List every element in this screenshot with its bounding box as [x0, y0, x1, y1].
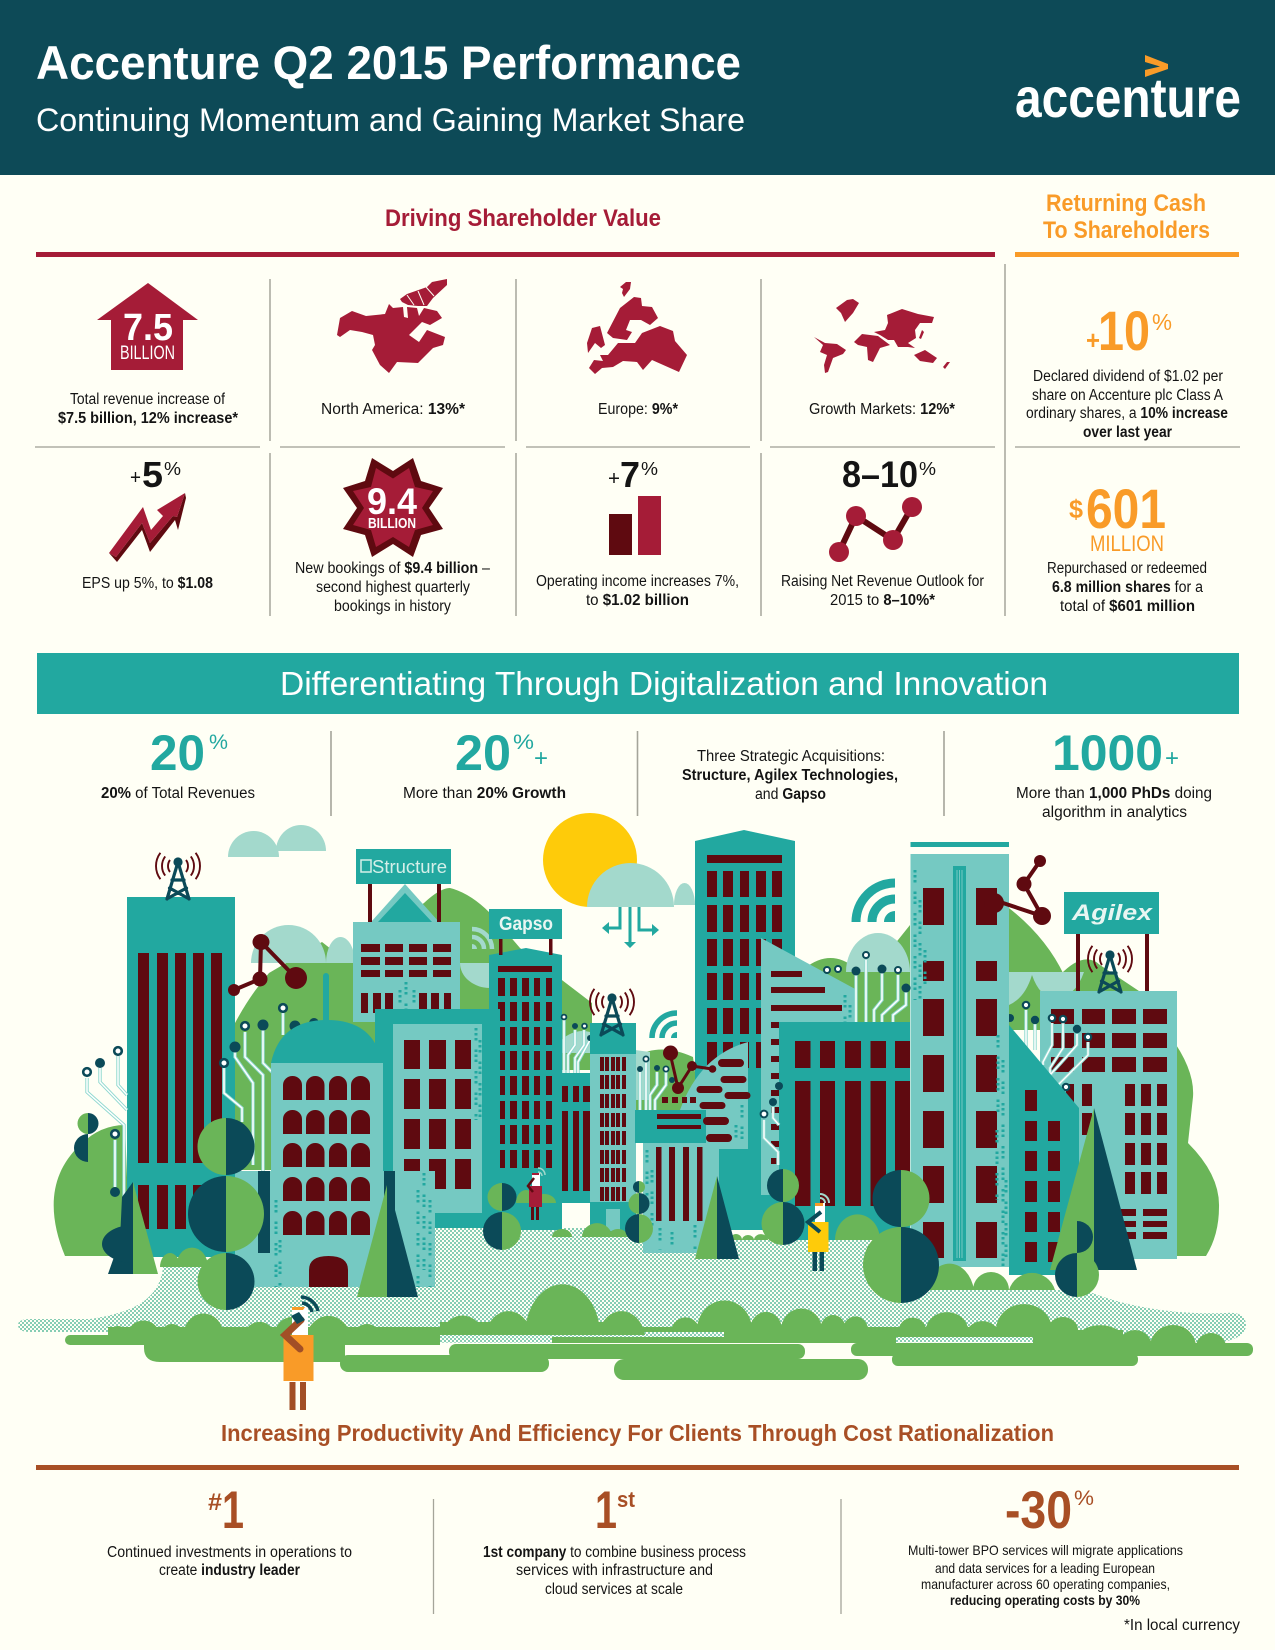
panel: outlook: 2015 to 8–10%* — [830, 592, 936, 609]
text: bookings: second highest quarterly — [316, 579, 470, 596]
panel: outlook: % — [919, 459, 936, 479]
stat: first company: 1 — [595, 1481, 617, 1540]
circuit lines: right centre — [761, 952, 910, 1165]
cloud with arrows — [587, 863, 695, 948]
icon: house arrow: 7.5 — [123, 307, 173, 349]
stat: number one: Continued investments in operations to — [107, 1544, 352, 1561]
stat: 20 percent growth: % — [513, 731, 534, 754]
heading: returning cash — [1015, 190, 1239, 257]
header banner — [0, 0, 1275, 175]
panel: north america — [321, 279, 466, 418]
panel: outlook: 8–10 — [842, 454, 918, 495]
building: gapso with sign: Gapso — [499, 914, 553, 935]
icon: north america map — [337, 279, 447, 373]
small bushes behind trees — [160, 1190, 1055, 1290]
building: tall light tower — [910, 842, 1009, 1273]
stat: number one: # — [208, 1489, 222, 1516]
panel: new bookings — [295, 458, 490, 615]
panel: outlook — [781, 454, 984, 609]
panel: buyback: 601 — [1086, 477, 1166, 540]
agilex sign posts — [1076, 934, 1149, 992]
building: striped low — [643, 1143, 719, 1253]
text: dividend: Declared dividend of $1.02 per — [1033, 368, 1223, 385]
molecule: centre — [663, 1046, 716, 1094]
stat: first company — [483, 1481, 746, 1598]
text: dividend — [1026, 368, 1228, 441]
building: dome — [235, 973, 435, 1291]
text: buyback: Repurchased or redeemed — [1047, 560, 1207, 577]
stat: 20 percent growth — [403, 725, 566, 802]
icon: house arrow — [97, 283, 198, 370]
ground — [18, 1228, 1246, 1343]
panel: dividend: 10 — [1098, 299, 1150, 362]
stat: minus 30 percent: and data services for a leading European — [935, 1560, 1155, 1576]
circuit lines: right — [1006, 1002, 1091, 1095]
icon: star badge: BILLION — [368, 516, 416, 532]
stat: 1000 PhDs: algorithm in analytics — [1042, 804, 1187, 821]
circuit lines: left — [83, 1004, 319, 1200]
building: domed light with pills — [635, 1042, 780, 1230]
triangle tree: dome right — [357, 1185, 418, 1297]
person: red — [528, 1168, 545, 1220]
text: bookings — [295, 560, 490, 615]
triangle tree: left — [102, 1182, 158, 1274]
stat: minus 30 percent: % — [1074, 1487, 1094, 1510]
panel: dividend — [1026, 299, 1228, 441]
title: Accenture Q2 2015 Performance — [36, 36, 741, 89]
panel: dividend: + — [1086, 325, 1100, 355]
tree: small left — [74, 1113, 99, 1162]
icon: rising arrow — [109, 493, 186, 562]
stat: first company: cloud services at scale — [545, 1581, 683, 1598]
person: orange — [284, 1297, 318, 1410]
text: buyback — [1047, 560, 1207, 615]
wifi icons — [472, 883, 895, 1038]
text: revenue — [58, 391, 239, 427]
stat: 20 percent growth: More than 20% Growth — [403, 785, 566, 802]
panel: buyback: MILLION — [1090, 531, 1164, 556]
text: acquisitions: and Gapso — [755, 786, 826, 803]
stat: number one — [107, 1481, 352, 1579]
building: structure with sign: Structure — [372, 857, 447, 877]
panel: growth markets — [809, 299, 956, 418]
clouds — [228, 825, 1084, 1100]
tree: centre right — [762, 1169, 804, 1245]
stat: number one: create industry leader — [159, 1562, 300, 1579]
panel: revenue — [58, 283, 239, 427]
stat: 1000 PhDs: 1000 — [1052, 725, 1163, 781]
panel: north america: North America: 13%* — [321, 401, 466, 418]
text: dividend: share on Accenture plc Class A — [1032, 387, 1224, 404]
hills — [54, 888, 1219, 1256]
panel: operating income: Operating income increases 7%, — [536, 573, 739, 590]
stat: 1000 PhDs — [1016, 725, 1212, 821]
tree: centre — [625, 1181, 653, 1243]
panel: operating income: % — [641, 459, 658, 479]
triangle tree: right — [1050, 1108, 1137, 1270]
building: teal wedge — [1009, 1025, 1079, 1275]
text: dividend: over last year — [1083, 424, 1172, 441]
panel: eps: 5 — [142, 454, 163, 495]
text: revenue: $7.5 billion, 12% increase* — [58, 410, 239, 427]
agilex sign — [1064, 892, 1159, 934]
subtitle: Continuing Momentum and Gaining Market Share — [36, 102, 745, 138]
panel: buyback: $ — [1069, 494, 1084, 524]
stat: 1000 PhDs: + — [1165, 745, 1179, 772]
heading: driving shareholder value — [36, 205, 995, 257]
stat: minus 30 percent: Multi-tower BPO services will migrate applications — [908, 1542, 1183, 1558]
banner: digitalization: Differentiating Through Digitalization and Innovation — [280, 665, 1048, 702]
panel: europe: Europe: 9%* — [598, 401, 679, 418]
tower: left — [127, 853, 235, 1257]
tree: right — [1055, 1221, 1099, 1297]
text: buyback: total of $601 million — [1060, 598, 1195, 615]
text: acquisitions — [682, 748, 898, 803]
molecule: left — [228, 934, 307, 996]
stat: first company: services with infrastructure and — [516, 1562, 713, 1579]
icon: star badge — [343, 458, 443, 557]
heading: driving shareholder value: Driving Shareholder Value — [385, 205, 661, 232]
text: acquisitions: Three Strategic Acquisitions: — [697, 748, 885, 765]
tree: dome left — [188, 1118, 264, 1310]
sun — [543, 813, 637, 907]
building: structure with sign — [353, 849, 460, 1022]
panel: eps: + — [130, 467, 141, 489]
text: buyback: 6.8 million shares for a — [1052, 579, 1203, 596]
panel: eps: EPS up 5%, to $1.08 — [82, 575, 213, 592]
stat: first company: st — [617, 1487, 636, 1512]
text: acquisitions: Structure, Agilex Technologies, — [682, 767, 898, 784]
building: teal with long windows — [779, 1022, 910, 1240]
text: bookings: bookings in history — [334, 598, 451, 615]
panel: buyback — [1047, 477, 1207, 615]
illustration: digital city — [18, 813, 1253, 1410]
icon: world map — [814, 299, 950, 373]
building: small windows — [562, 1073, 592, 1203]
icon: line chart — [829, 497, 922, 562]
stat: 20 percent revenues — [101, 725, 255, 802]
panel: operating income: + — [608, 468, 620, 490]
stat: minus 30 percent: -30 — [1005, 1481, 1072, 1540]
panel: europe — [587, 282, 687, 418]
stat: minus 30 percent: reducing operating costs by 30% — [950, 1592, 1140, 1608]
tree: big right centre — [863, 1170, 939, 1303]
heading: returning cash: To Shareholders — [1043, 217, 1210, 244]
building: thin tower — [590, 989, 636, 1237]
heading: productivity: Increasing Productivity And Efficiency For Clients Through Cost Rationalization — [221, 1420, 1054, 1446]
circuit lines: middle — [562, 1015, 675, 1110]
panel: dividend: % — [1152, 309, 1172, 335]
foreground bushes — [65, 1284, 1253, 1380]
building: gapso with sign — [489, 909, 562, 1230]
footnote: *In local currency — [1124, 1617, 1240, 1634]
building: front mid — [375, 1009, 500, 1228]
stat: 20 percent revenues: 20 — [150, 725, 205, 781]
panel: outlook: Raising Net Revenue Outlook for — [781, 573, 984, 590]
agilex sign: Agilex — [1071, 900, 1153, 925]
text: dividend: ordinary shares, a 10% increase — [1026, 405, 1228, 422]
panel: operating income: 7 — [620, 454, 640, 495]
panel: operating income: to $1.02 billion — [586, 592, 689, 609]
stat: minus 30 percent: manufacturer across 60 operating companies, — [921, 1576, 1170, 1592]
stat: 1000 PhDs: More than 1,000 PhDs doing — [1016, 785, 1212, 802]
icon: star badge: 9.4 — [367, 481, 417, 522]
building: right with agilex tower — [1040, 946, 1177, 1259]
icon: europe map — [587, 282, 687, 374]
panel: eps: % — [164, 459, 181, 479]
tree: centre left — [483, 1183, 521, 1250]
stat: 20 percent growth: 20 — [455, 725, 511, 781]
stat: 20 percent growth: + — [534, 745, 548, 772]
panel: operating income — [536, 454, 739, 609]
triangle tree: centre — [695, 1176, 739, 1259]
panel: eps — [82, 454, 213, 592]
heading: productivity — [36, 1420, 1239, 1470]
molecule: right — [984, 855, 1051, 925]
stat: number one: 1 — [222, 1481, 244, 1540]
stat: minus 30 percent — [908, 1481, 1183, 1608]
person: yellow — [808, 1194, 829, 1271]
banner: digitalization — [37, 653, 1239, 714]
text: bookings: New bookings of $9.4 billion – — [295, 560, 490, 577]
heading: returning cash: Returning Cash — [1046, 190, 1206, 217]
icon: bars — [609, 496, 661, 555]
panel: growth markets: Growth Markets: 12%* — [809, 401, 956, 418]
icon: house arrow: BILLION — [120, 343, 175, 364]
logo: accenture: accenture — [1015, 66, 1241, 129]
stat: 20 percent revenues: % — [209, 731, 228, 754]
building: tall centre tower — [695, 830, 795, 1115]
stat: first company: 1st company to combine business process — [483, 1544, 746, 1561]
text: revenue: Total revenue increase of — [70, 391, 226, 408]
stat: 20 percent revenues: 20% of Total Revenues — [101, 785, 255, 802]
building: triangular — [761, 938, 857, 1195]
